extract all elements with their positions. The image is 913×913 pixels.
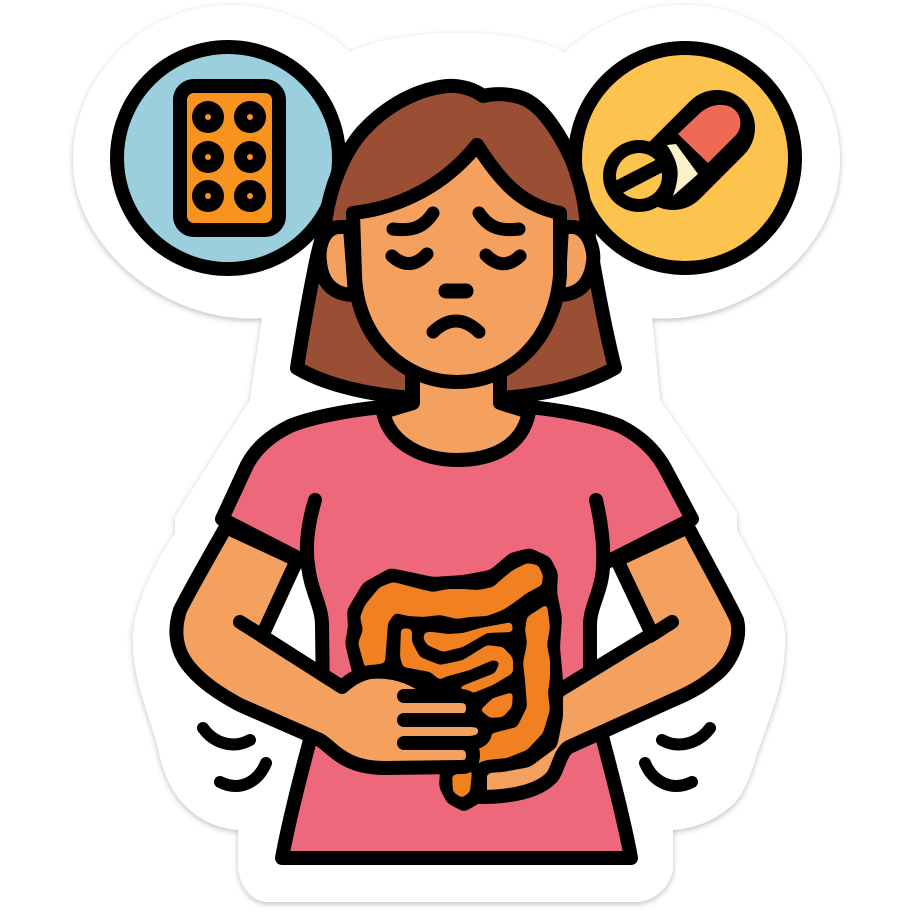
icon: blister pack circle (117, 47, 339, 269)
shirt (222, 407, 692, 858)
fingers (404, 696, 470, 743)
intestine outline (345, 548, 563, 812)
ears (320, 227, 593, 295)
neck (383, 370, 529, 460)
hair (297, 86, 615, 398)
intestine (345, 548, 563, 812)
right arm (480, 527, 738, 797)
pain motion lines right (645, 728, 710, 786)
facial features (392, 213, 520, 332)
shirt creases (307, 500, 603, 567)
face (353, 145, 560, 382)
left arm and hand (176, 527, 485, 768)
pain motion lines left (203, 728, 266, 786)
intestine fill (358, 563, 550, 798)
icon: capsule and tablet circle (575, 48, 795, 268)
